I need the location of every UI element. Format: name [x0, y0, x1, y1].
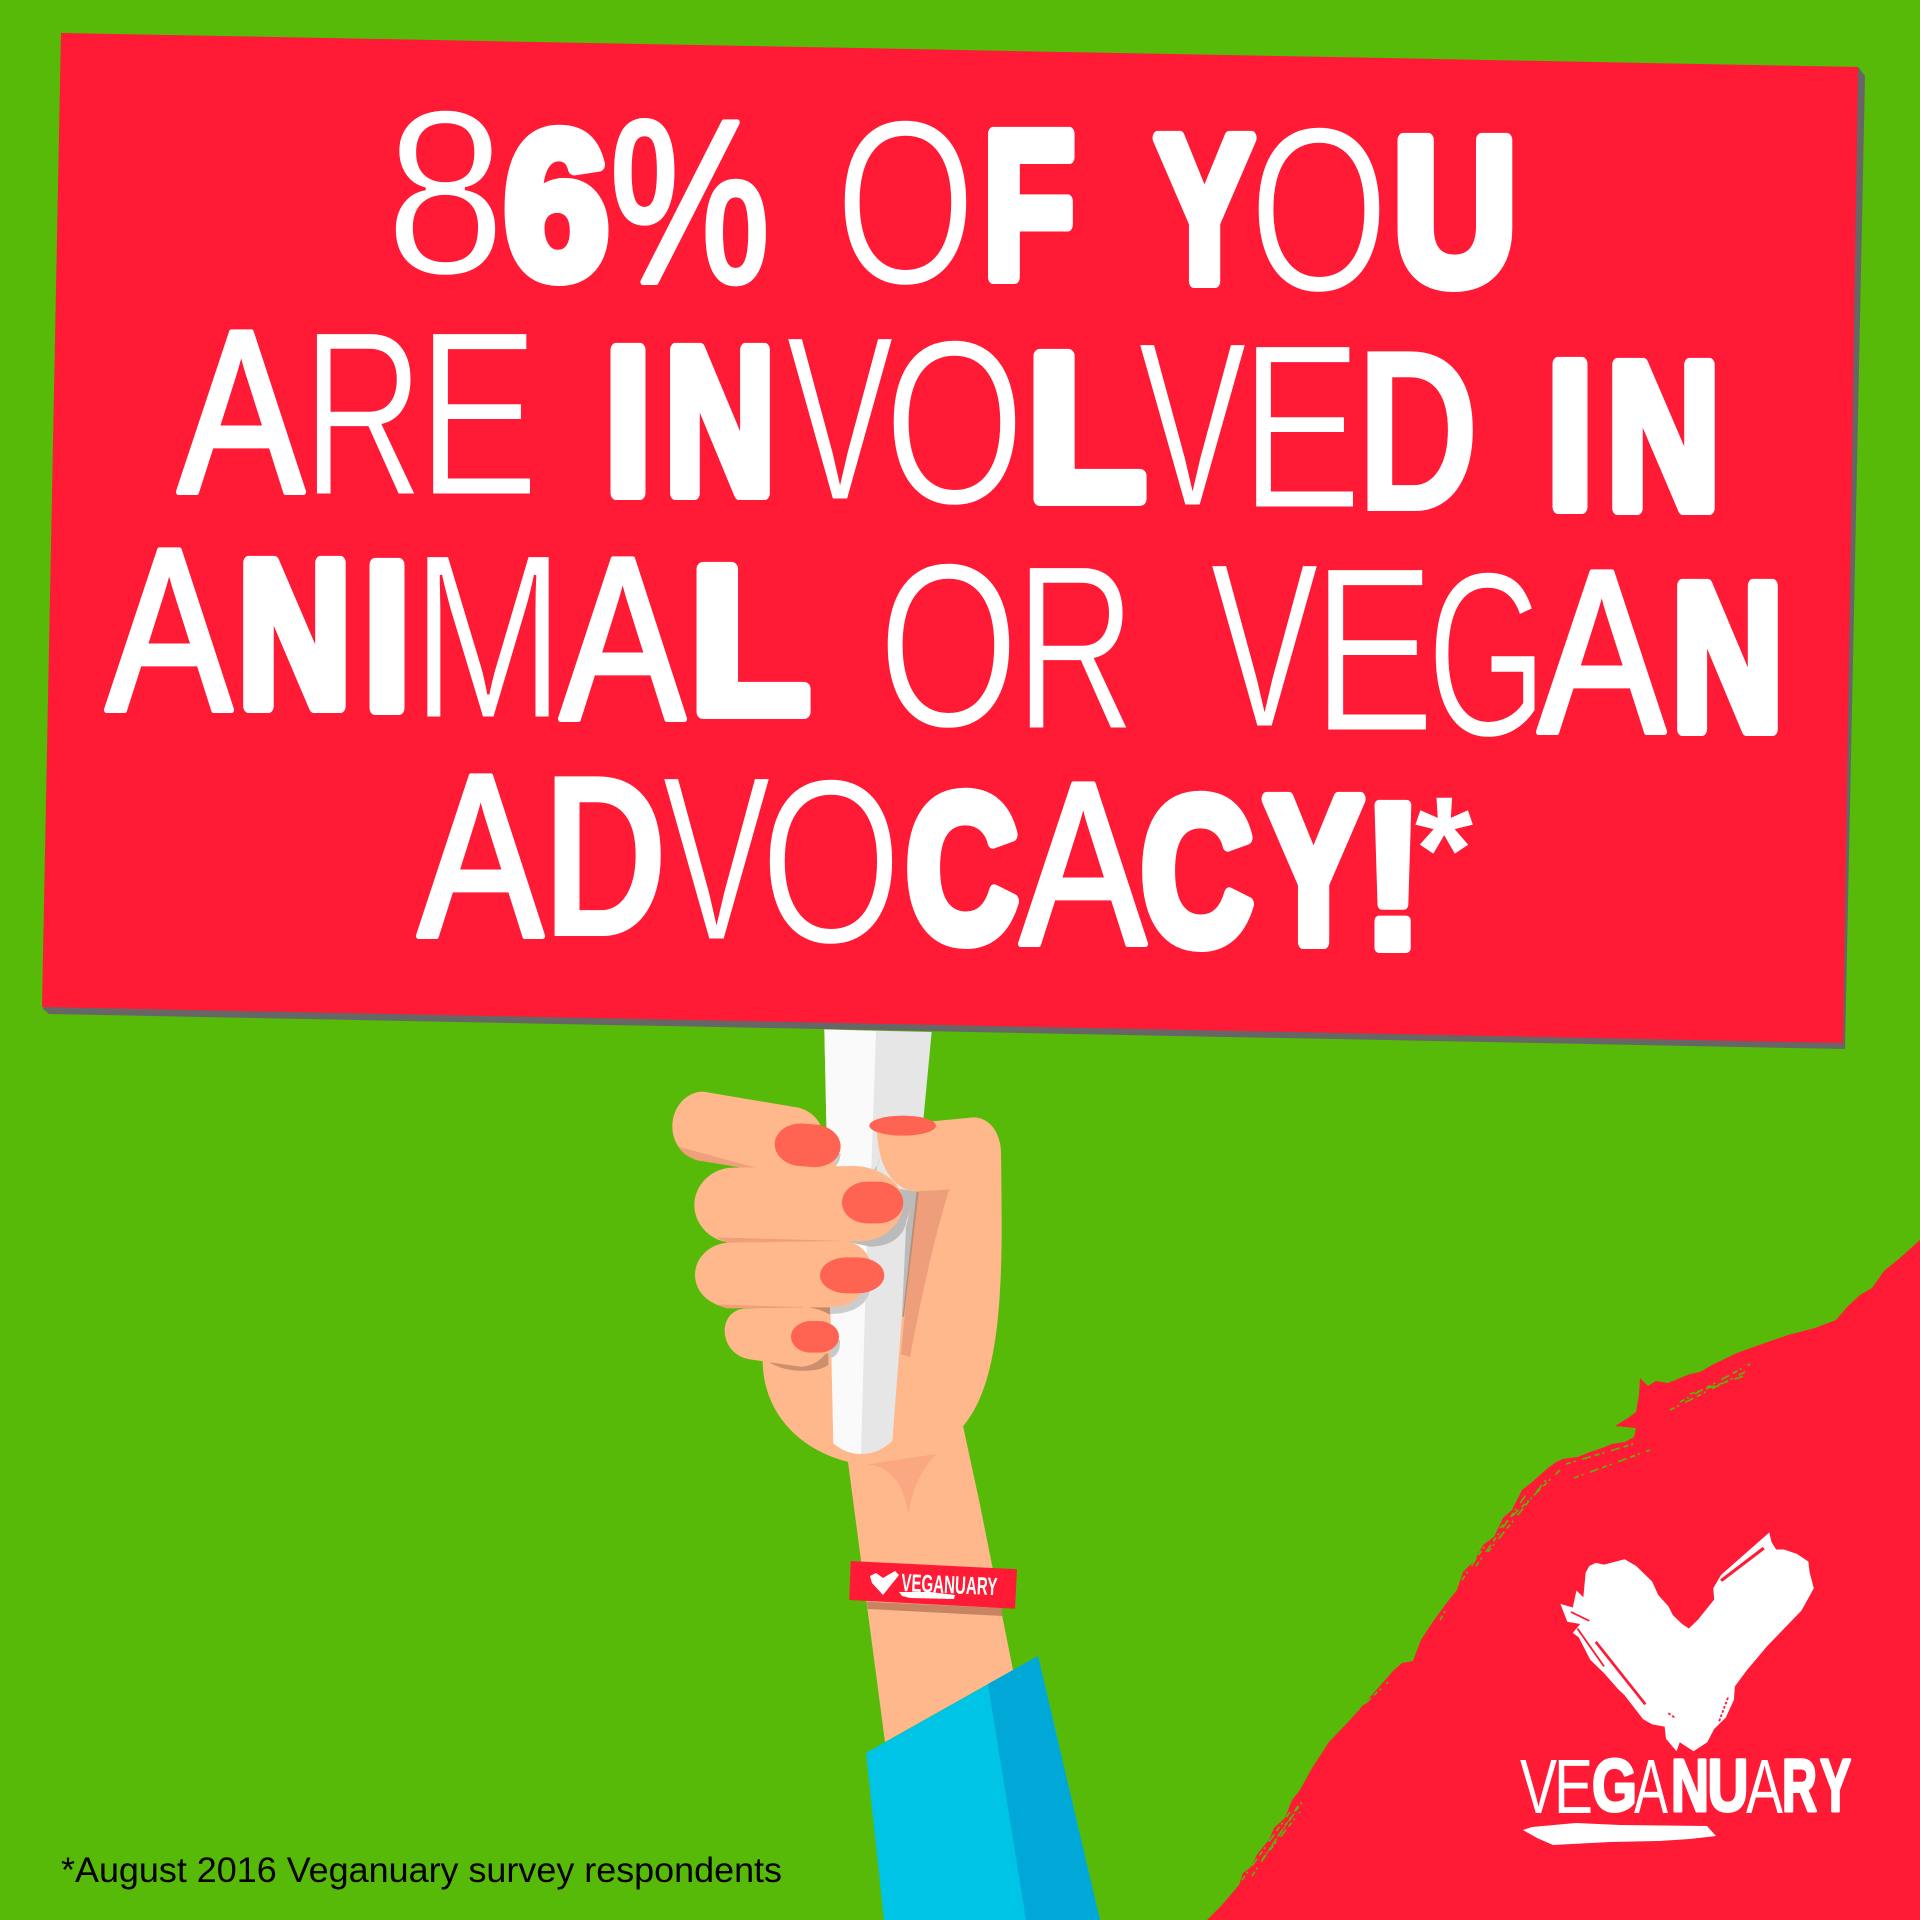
wrist crease: [867, 1454, 937, 1515]
pole: [824, 1029, 932, 1454]
headline line 3: G: [1427, 523, 1547, 787]
headline line 4: O: [760, 730, 902, 994]
headline line 3: A: [106, 501, 232, 760]
finger: pinky: [725, 1307, 830, 1371]
logo: wordmark: A: [1634, 1744, 1668, 1830]
headline line 2: N: [1607, 321, 1720, 553]
headline line 3: E: [1312, 518, 1435, 782]
headline line 1: O: [835, 71, 976, 335]
headline line 4: A: [418, 727, 543, 986]
headline line 2: R: [302, 282, 424, 546]
palm crease: [901, 1189, 949, 1357]
finger: ring: [695, 1241, 872, 1308]
bracelet shadow: [867, 1602, 1003, 1616]
sign: [42, 33, 1865, 1049]
logo: brush underline: [1523, 1823, 1716, 1845]
red brush corner: [1207, 1240, 1920, 1920]
sign shadow: [42, 67, 1865, 1049]
hand and pole: [672, 1029, 1002, 1515]
headline line 3: A: [1538, 523, 1665, 782]
headline line 2: A: [178, 283, 304, 542]
headline line 2: N: [665, 306, 775, 538]
headline line 4: !: [1361, 761, 1425, 993]
headline line 3: M: [411, 505, 565, 769]
headline line 1: 8: [385, 61, 506, 325]
logo: wordmark: [1520, 1744, 1851, 1830]
headline line 1: F: [983, 90, 1075, 322]
headline line 2: O: [884, 291, 1025, 555]
logo: wordmark: N: [1671, 1744, 1709, 1827]
headline line 2: V: [786, 287, 894, 551]
headline line 2: I: [605, 306, 651, 538]
headline line 2: V: [1138, 293, 1247, 557]
headline line 4: Y: [1264, 755, 1363, 987]
logo: wordmark: A: [1746, 1744, 1783, 1830]
bracelet: [849, 1561, 1017, 1609]
footnote: *August 2016 Veganuary survey respondents: [61, 1851, 782, 1890]
logo: wordmark: Y: [1820, 1744, 1851, 1827]
headline line 1: U: [1393, 96, 1517, 328]
logo: wordmark: U: [1708, 1744, 1748, 1827]
headline line 3: A: [560, 510, 685, 769]
thumb: [877, 1117, 1002, 1220]
headline line 3: N: [1672, 542, 1783, 774]
forearm: [848, 1426, 1013, 1742]
headline line 4: V: [662, 727, 771, 991]
logo: brush heart: [1560, 1532, 1814, 1751]
palm: [763, 1153, 1002, 1462]
headline line 1: Y: [1155, 94, 1254, 326]
headline line 2: I: [1547, 320, 1593, 552]
headline line 2: D: [1356, 302, 1480, 561]
finger: middle: [694, 1166, 903, 1243]
headline line 1: O: [1249, 78, 1389, 342]
logo: wordmark: R: [1782, 1744, 1817, 1827]
headline line 4: D: [543, 727, 668, 986]
logo: wordmark: E: [1554, 1744, 1593, 1830]
nail: ring: [820, 1257, 884, 1293]
finger shadows on pole: [830, 1153, 917, 1358]
logo: wordmark: G: [1592, 1744, 1637, 1827]
headline line 4: C: [906, 753, 1018, 985]
headline line 3: L: [690, 525, 810, 757]
bracelet: VEGANUARY: [901, 1569, 998, 1601]
nail: middle: [842, 1182, 903, 1223]
headline line 1: %: [610, 73, 770, 332]
finger: index: [672, 1092, 837, 1173]
headline line 2: E: [1240, 295, 1362, 559]
headline line 3: R: [1015, 516, 1136, 780]
sign board: [42, 33, 1858, 1043]
sleeve: [866, 1656, 1100, 1920]
nail: pinky: [791, 1321, 839, 1353]
headline line 3: N: [238, 519, 351, 751]
headline line 4: *: [1415, 765, 1474, 933]
headline line 3: V: [1210, 514, 1319, 778]
headline line 2: L: [1027, 312, 1146, 544]
nail: index: [773, 1122, 842, 1169]
headline line 3: O: [878, 514, 1019, 778]
headline: [106, 61, 1783, 994]
headline line 4: A: [1020, 735, 1146, 994]
headline line 4: C: [1141, 756, 1253, 988]
headline line 1: 6: [504, 90, 609, 322]
nail: thumb: [869, 1116, 936, 1136]
headline line 3: I: [364, 521, 410, 753]
headline line 2: E: [417, 282, 539, 546]
logo: wordmark: V: [1520, 1744, 1557, 1830]
